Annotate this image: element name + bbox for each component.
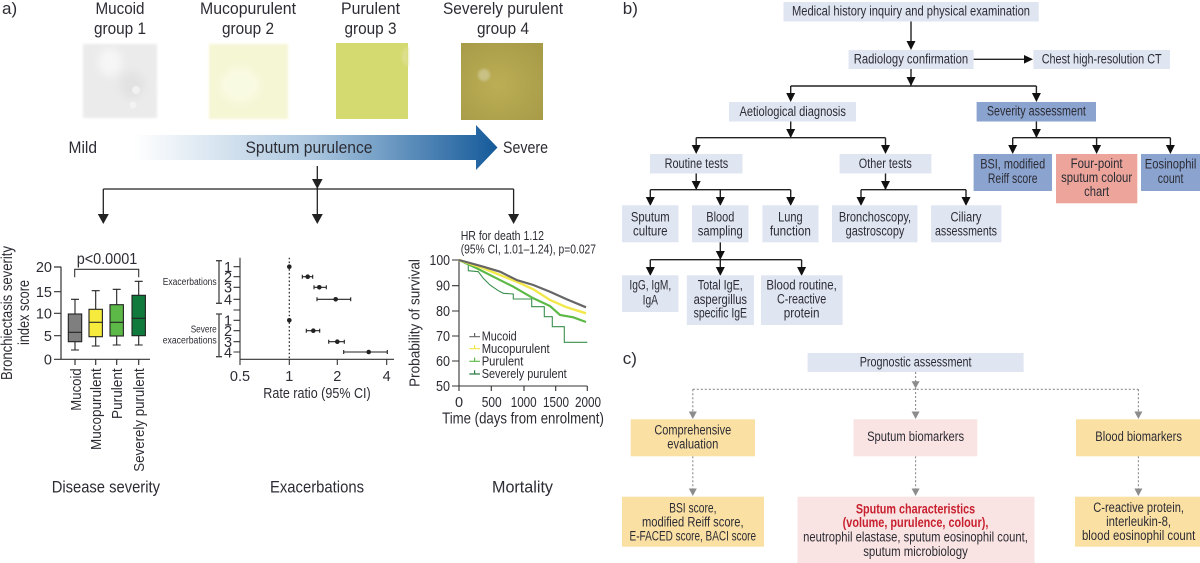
reference line at 1 [288,258,290,359]
y axis values: 70 [436,329,450,345]
box: blood markers: interleukin-8, [1106,514,1171,529]
y axis title: index score [16,280,33,345]
box: lung function: Lung [778,209,803,224]
box: blood biomarkers: Blood biomarkers [1095,429,1182,444]
box: lung function: function [770,223,811,238]
box: blood sampling: Blood [706,209,734,224]
row numbers [224,260,232,362]
box: mucoid [68,299,82,350]
x axis values: 1500 [543,395,569,411]
box: ciliary assessments: Ciliary [950,209,982,224]
box: purulent [110,289,123,345]
group labels: Severe [191,324,217,335]
box: other tests [840,154,931,174]
heading: purulent group 3: group 3 [344,19,396,38]
box: blood routine: Blood routine, [766,277,837,292]
axes [54,267,150,365]
x axis values: 2 [333,369,341,385]
y axis values [36,260,52,368]
curve: mucopurulent [459,260,586,313]
x axis values [455,395,601,411]
category labels: Mucoid [68,368,85,411]
box: blood routine: protein [784,306,819,321]
x axis values: 1000 [511,395,537,411]
box: clinical scores [622,497,764,547]
box: chest CT: Chest high-resolution CT [1042,52,1162,67]
box: sputum culture: culture [633,223,668,238]
group labels: Exacerbations [163,277,217,288]
y axis values: 15 [36,285,52,301]
y axis values: 0 [44,352,52,368]
caption: mortality: Mortality [492,478,553,497]
heading: severely purulent group 4: group 4 [477,19,529,38]
category labels: Severely purulent [131,368,148,472]
group labels: exacerbations [163,335,217,346]
box: total IgE: specific IgE [694,306,747,321]
box plot: disease severity [0,246,150,472]
box: blood routine: C-reactive [777,292,826,306]
box: sputum characteristics: sputum microbiology [863,544,968,559]
legend: Mucopurulent [482,341,550,356]
row numbers: 3 [224,335,232,351]
box: eosinophil count [1141,154,1200,191]
curve: mucoid [459,260,586,307]
y axis values: 60 [436,354,450,370]
x axis values: 0.5 [230,369,250,385]
curve: severely purulent [459,260,587,342]
box: comprehensive evaluation: evaluation [667,437,718,452]
box: sputum characteristics [798,497,1034,563]
box: ciliary assessments [931,205,1001,242]
box: BSI and modified Reiff score [974,154,1052,191]
y axis values [430,253,450,395]
y axis values: 10 [36,306,52,322]
heading: mucopurulent group 2 [200,0,296,38]
box: prognostic assessment: Prognostic assessment [860,354,972,370]
significance bracket: p<0.0001 [77,251,137,268]
box: sputum culture: Sputum [631,209,670,224]
box: blood markers [1075,497,1200,547]
box: sputum biomarkers [854,419,977,456]
legend: Purulent [482,354,524,368]
box: blood sampling: sampling [698,223,743,238]
panel label c: c) [623,349,637,368]
box: severity assessment [977,102,1096,122]
box: sputum culture [622,205,678,242]
box: bronchoscopy, gastroscopy [832,205,918,242]
significance bracket [75,251,139,277]
box: mucopurulent [89,291,102,346]
caption: exacerbations: Exacerbations [270,478,364,497]
box: total IgE: Total IgE, [698,277,743,292]
box: bronchoscopy, gastroscopy: gastroscopy [846,223,905,238]
hazard ratio note: (95% CI, 1.01–1.24), p=0.027 [461,242,596,256]
y axis values: 20 [36,260,52,276]
dashed connectors [689,372,1142,496]
x axis values: 2000 [575,395,601,411]
box: chest CT [1033,50,1170,69]
box: routine tests: Routine tests [665,156,728,171]
category labels [68,368,148,472]
box: sputum characteristics: Sputum characteristics [856,501,975,516]
box: aetiological diagnosis [729,102,856,122]
box: blood routine [761,275,843,325]
box: other tests: Other tests [859,156,912,171]
x axis title: Time (days from enrolment) [442,410,604,428]
row numbers: 4 [224,292,232,308]
flowchart connectors [646,22,1175,276]
box: immunoglobulins: IgA [643,292,658,307]
panel c: prognostic assessment [622,349,1200,563]
y axis values: 90 [436,279,450,295]
box: BSI and modified Reiff score: BSI, modified [980,157,1045,172]
legend: Severely purulent [482,366,567,381]
box: blood biomarkers [1076,419,1200,456]
survival chart: mortality [406,229,604,428]
row numbers: 4 [224,346,232,362]
box: immunoglobulins: IgG, IgM, [629,277,671,292]
label: mild: Mild [68,138,97,157]
sputum photo: severely purulent [461,43,543,120]
caption: disease severity: Disease severity [52,478,160,497]
y axis title: Probability of survival [406,259,424,387]
box: four-point sputum colour chart: sputum colour [1061,170,1133,185]
box: immunoglobulins [622,275,678,312]
box: four-point sputum colour chart: chart [1084,184,1109,199]
row numbers: 3 [224,280,232,296]
gradient arrow: sputum purulence: Sputum purulence [246,138,372,157]
legend: Mucoid [482,328,517,344]
y axis values: 5 [44,329,52,345]
curve: purulent [459,260,586,322]
box: eosinophil count: count [1158,171,1184,186]
panel a: sputum purulence [0,0,604,497]
confidence intervals [287,264,387,354]
box: clinical scores: BSI score, [669,500,716,515]
box: radiology confirmation: Radiology confirmation [854,52,968,67]
x axis values: 0 [455,395,463,411]
box: clinical scores: E-FACED score, BACI score [630,528,756,543]
row numbers: 2 [224,324,232,340]
box: BSI and modified Reiff score: Reiff score [988,171,1038,186]
sputum photo: mucopurulent [209,44,288,119]
heading: purulent group 3 [341,0,400,38]
panel b: diagnostic flowchart [622,0,1200,325]
box: lung function [762,205,818,242]
forest plot: exacerbations [163,258,394,402]
box: sputum characteristics: neutrophil elastase, sputum eosinophil count, [803,529,1028,544]
y axis values: 100 [430,253,450,269]
heading: mucopurulent group 2: group 2 [222,19,274,38]
box: total IgE: aspergillus [694,292,747,307]
category labels: Purulent [109,368,126,419]
heading: mucoid group 1: group 1 [94,19,146,38]
axes [234,258,394,365]
heading: severely purulent group 4 [443,0,563,38]
category labels: Mucopurulent [88,368,105,450]
sputum photo: mucoid [83,44,157,118]
group brackets [216,261,222,357]
group labels [163,277,217,346]
box: medical history [784,2,1039,22]
x axis values: 500 [482,395,502,411]
box: total IgE [687,275,754,325]
row numbers: 1 [224,314,232,330]
box: severity assessment: Severity assessment [987,104,1086,118]
label: severe: Severe [503,138,548,157]
box: aetiological diagnosis: Aetiological diagnosis [739,104,846,119]
hazard ratio note: HR for death 1.12 [461,229,544,243]
y axis values: 50 [436,379,450,395]
row numbers: 2 [224,270,232,286]
box: ciliary assessments: assessments [935,223,997,238]
x axis title: Rate ratio (95% CI) [263,386,371,402]
row numbers: 1 [224,260,232,276]
box: four-point sputum colour chart [1056,154,1137,203]
box: clinical scores: modified Reiff score, [642,514,744,529]
box: medical history: Medical history inquiry and physical examination [792,4,1030,18]
x axis values: 4 [383,369,391,385]
y axis values: 80 [436,304,450,320]
box: blood sampling [692,205,748,242]
box: four-point sputum colour chart: Four-point [1071,156,1123,171]
box: sputum characteristics: (volume, purulence, colour), [843,515,988,530]
legend [469,328,567,381]
x axis values [230,369,391,385]
connector arrows to three outcomes [98,166,519,224]
box: sputum biomarkers: Sputum biomarkers [867,429,964,444]
heading: mucoid group 1 [94,0,146,38]
box: radiology confirmation [849,50,974,69]
gradient arrow: sputum purulence [134,125,498,170]
sputum photo: purulent [336,43,408,119]
hazard ratio note [461,229,596,256]
axes [452,260,587,391]
box: comprehensive evaluation [631,419,755,456]
box: comprehensive evaluation: Comprehensive [654,423,731,438]
x axis values: 1 [285,369,293,385]
box: routine tests [650,154,742,174]
y axis title [0,246,33,380]
box: prognostic assessment [808,353,1024,372]
box: severely purulent [132,281,145,345]
box: bronchoscopy, gastroscopy: Bronchoscopy, [839,209,911,224]
